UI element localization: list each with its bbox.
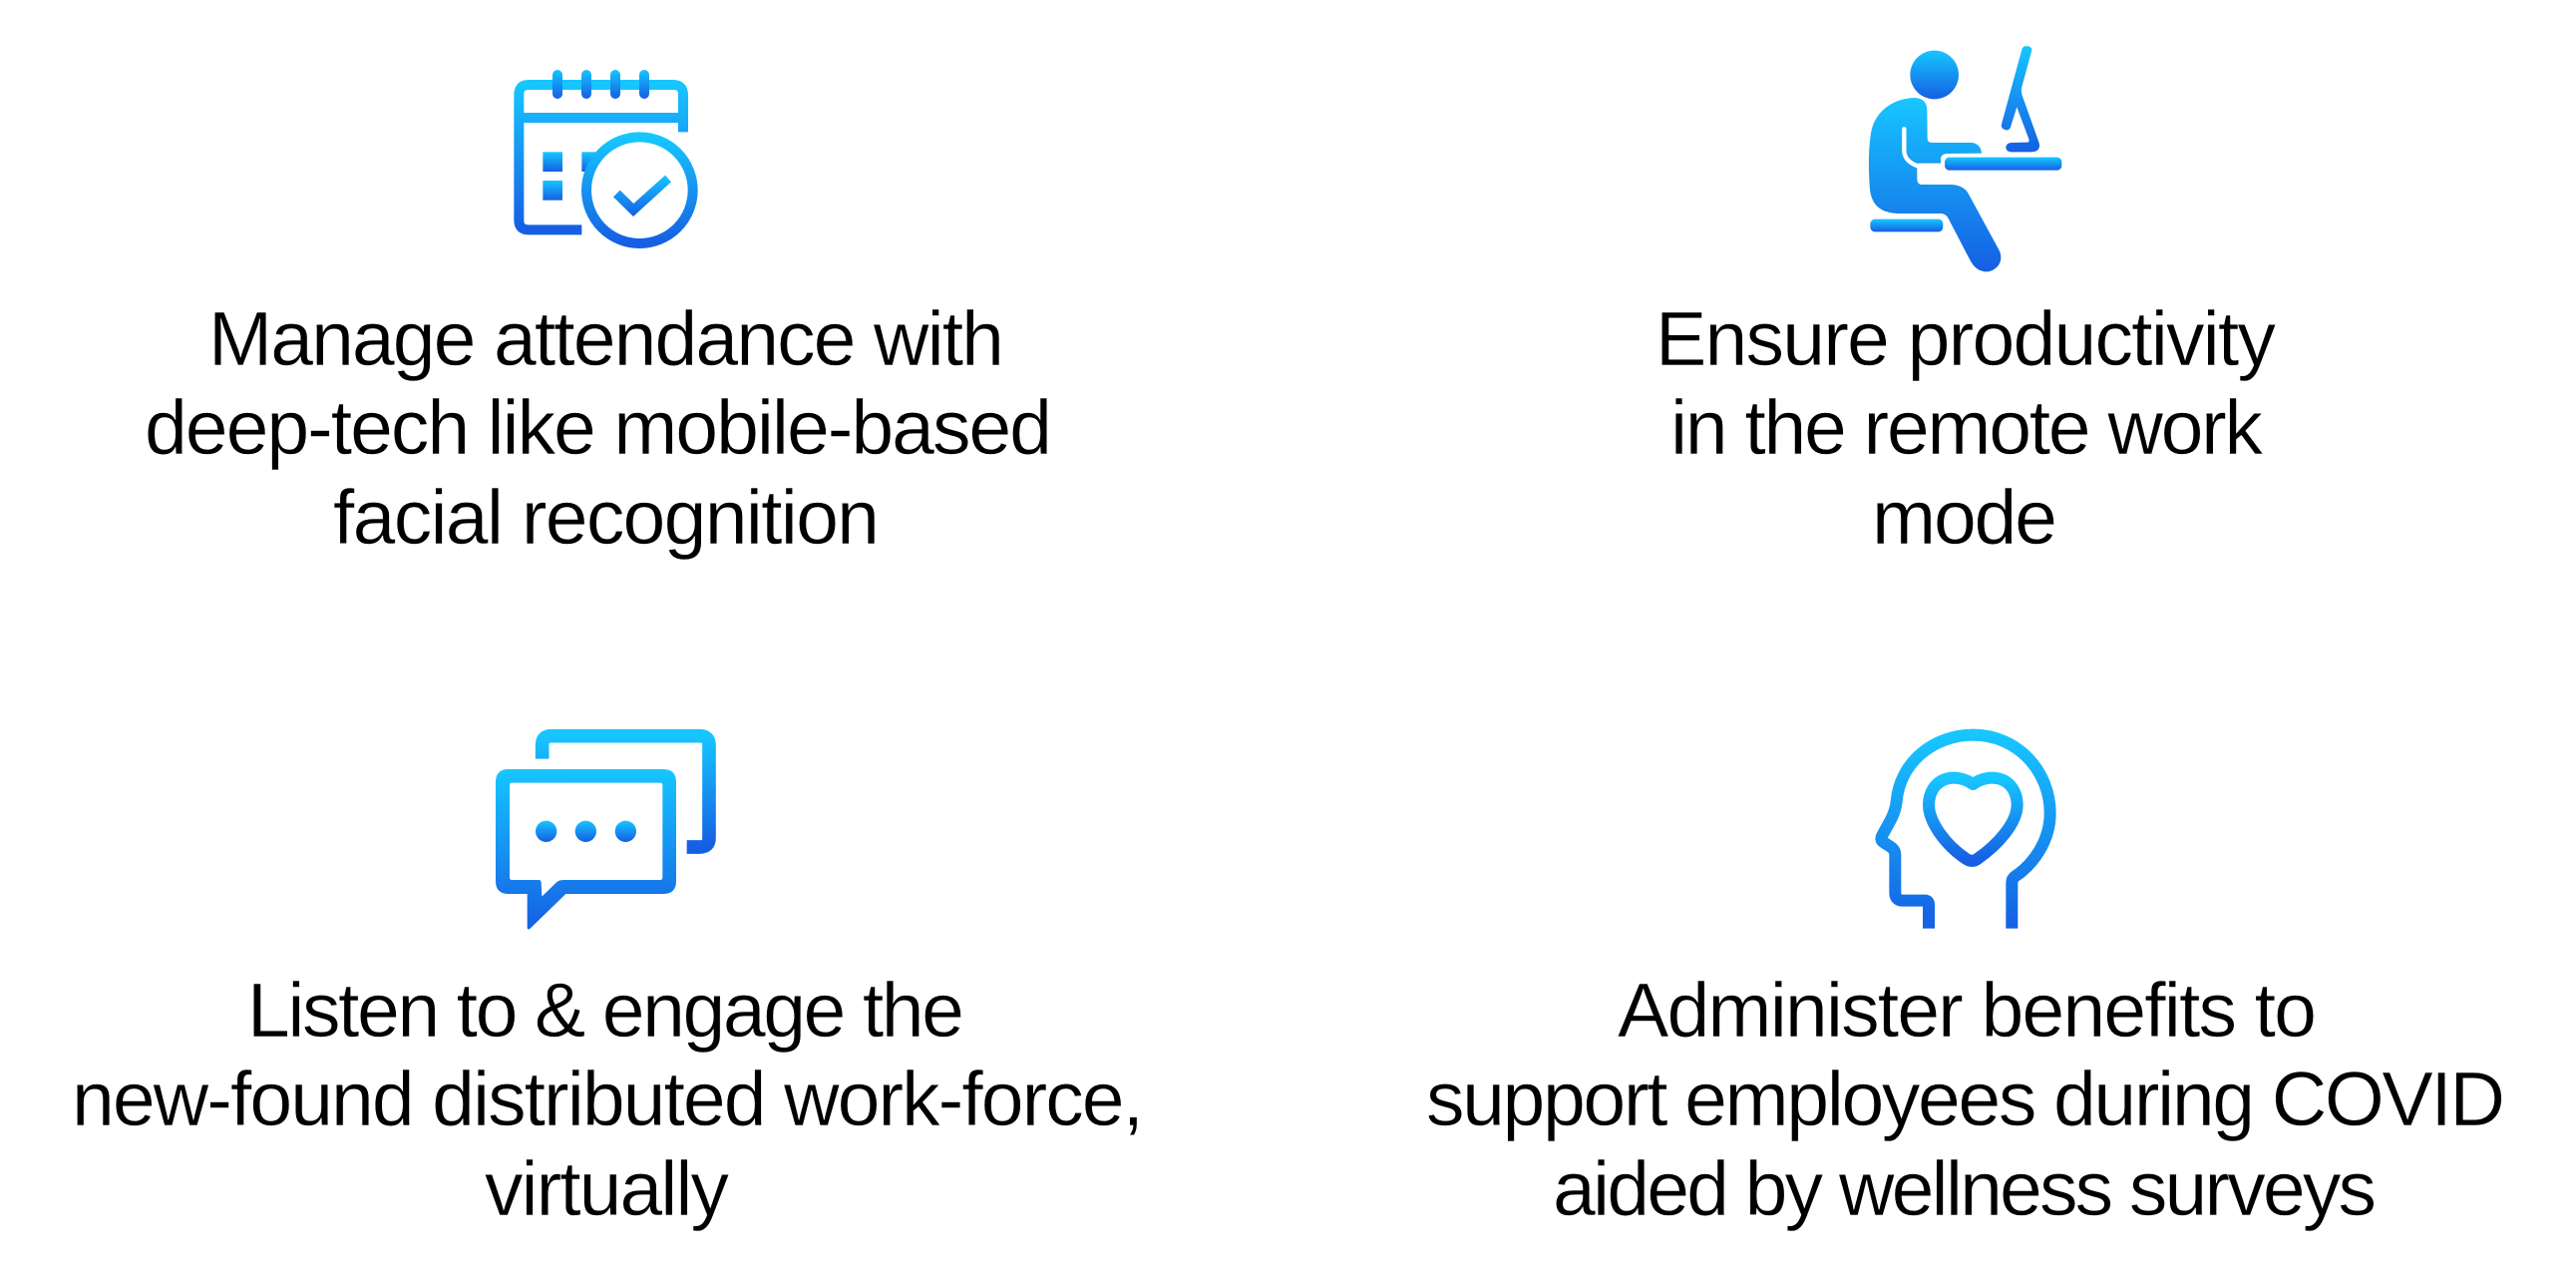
text: administer benefits: Administer benefits to bbox=[1618, 968, 2317, 1054]
text: administer benefits bbox=[1426, 968, 2505, 1232]
text: ensure productivity: Ensure productivity bbox=[1656, 296, 2276, 382]
panel: manage attendance bbox=[145, 70, 1052, 561]
text: administer benefits: support employees during COVID bbox=[1426, 1057, 2505, 1142]
text: ensure productivity: mode bbox=[1872, 475, 2057, 561]
text: manage attendance: facial recognition bbox=[333, 475, 880, 561]
text: manage attendance: Manage attendance with bbox=[208, 296, 1004, 382]
text: listen and engage: Listen to & engage the bbox=[247, 968, 964, 1054]
text: administer benefits: aided by wellness surveys bbox=[1553, 1146, 2377, 1232]
icon: head with heart bbox=[1881, 735, 2050, 929]
text: listen and engage: virtually bbox=[485, 1146, 730, 1232]
text: ensure productivity: in the remote work bbox=[1670, 385, 2264, 471]
text: manage attendance bbox=[145, 296, 1052, 561]
panel: listen and engage bbox=[72, 736, 1144, 1232]
text: listen and engage: new-found distributed work-force, bbox=[72, 1057, 1144, 1142]
icon: person at desk bbox=[1869, 46, 2061, 271]
text: listen and engage bbox=[72, 968, 1144, 1232]
icon: calendar with check bbox=[519, 70, 693, 243]
panel: ensure productivity bbox=[1656, 46, 2276, 561]
text: manage attendance: deep-tech like mobile-based bbox=[145, 385, 1052, 471]
panel: administer benefits bbox=[1426, 735, 2505, 1232]
text: ensure productivity bbox=[1656, 296, 2276, 561]
icon: chat bubbles bbox=[496, 736, 709, 929]
